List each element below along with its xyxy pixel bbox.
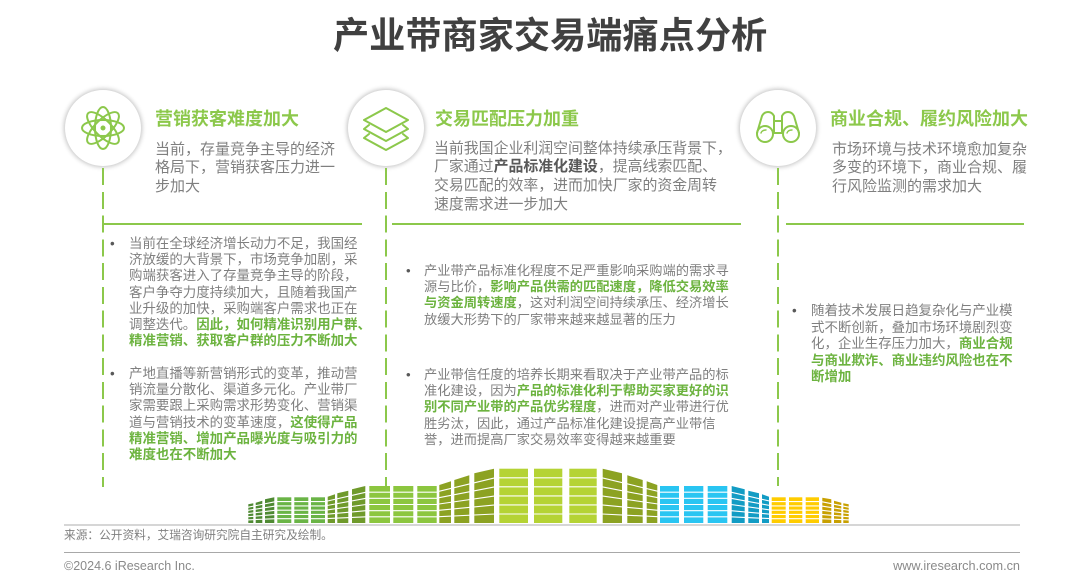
- text: matching bullet two: 准化建设，因为产品的标准化利于帮助买家更好的识: [424, 383, 729, 398]
- text: matching summary: 厂家通过产品标准化建设，提高线索匹配、: [434, 159, 717, 175]
- text: marketing bullet two: [110, 366, 357, 462]
- panel: 交易匹配压力加重: •: [406, 263, 411, 278]
- text: marketing bullet two: 难度也在不断加大: [129, 447, 237, 462]
- text: matching bullet one: 产业带产品标准化程度不足严重影响采购端的需求寻: [424, 263, 729, 278]
- text: matching bullet two: [406, 367, 729, 447]
- text: marketing summary: 格局下，营销获客压力进一: [155, 159, 335, 176]
- text: matching bullet two: 别不同产业带的产品优劣程度，进而对产业带进行优: [424, 399, 729, 414]
- text: compliance summary: [832, 140, 1027, 195]
- text: marketing bullet one: 济放缓的大背景下，市场竞争加剧，采: [129, 252, 357, 267]
- text: compliance summary: 行风险监测的需求加大: [832, 178, 982, 195]
- heading: matching: 交易匹配压力加重: [435, 109, 579, 129]
- text: marketing summary: 步加大: [155, 178, 200, 195]
- icon: atom: [65, 90, 141, 166]
- text: matching summary: 当前我国企业利润空间整体持续承压背景下，: [434, 140, 732, 156]
- text: marketing bullet one: 客户争夺力度持续加大，且随着我国产: [129, 285, 357, 300]
- text: marketing bullet one: 业升级的加快，采购端客户需求也正在: [129, 301, 357, 316]
- panel: 商业合规、履约风险加大: [736, 86, 1028, 486]
- text: marketing bullet two: 销流量分散化、渠道多元化。产业带厂: [129, 382, 357, 397]
- panel: 营销获客难度加大: •: [110, 236, 115, 251]
- illustration: skyline of buildings: [248, 468, 849, 523]
- source note: 来源：公开资料，艾瑞咨询研究院自主研究及绘制。: [64, 529, 333, 542]
- text: marketing bullet one: 调整迭代。因此，如何精准识别用户群、: [129, 317, 371, 332]
- text: matching bullet two: 产业带信任度的培养长期来看取决于产业带产品的标: [424, 367, 729, 382]
- panel: 交易匹配压力加重: [344, 86, 741, 486]
- text: marketing bullet two: 家需要跟上采购需求形势变化、营销渠: [129, 398, 357, 413]
- text: marketing bullet one: 当前在全球经济增长动力不足，我国经: [129, 236, 357, 251]
- text: matching bullet one: 源与比价，影响产品供需的匹配速度，降低交易效率: [424, 279, 729, 294]
- text: compliance bullet: [792, 303, 1013, 384]
- text: matching bullet one: [406, 263, 729, 327]
- text: compliance summary: 市场环境与技术环境愈加复杂: [832, 140, 1027, 158]
- website: www.iresearch.com.cn: [893, 559, 1020, 573]
- text: compliance summary: 多变的环境下，商业合规、履: [832, 159, 1027, 176]
- panel: 营销获客难度加大: [62, 86, 371, 487]
- text: compliance bullet: 化，企业生存压力加大，商业合规: [811, 336, 1013, 351]
- text: compliance bullet: 随着技术发展日趋复杂化与产业模: [811, 303, 1013, 318]
- icon: layers: [348, 90, 424, 166]
- copyright: ©2024.6 iResearch Inc.: [64, 559, 195, 573]
- text: matching bullet one: 放缓大形势下的厂家带来越来越显著的压力: [424, 312, 676, 327]
- title: 产业带商家交易端痛点分析: [333, 15, 767, 56]
- text: marketing bullet one: 购端获客进入了存量竞争主导的阶段，: [129, 268, 357, 283]
- text: matching summary: 速度需求进一步加大: [434, 197, 568, 213]
- text: marketing bullet one: 精准营销、获取客户群的压力不断加大: [129, 333, 357, 348]
- heading: marketing: 营销获客难度加大: [155, 109, 299, 129]
- text: marketing bullet two: 道与营销技术的变革速度，这使得产品: [129, 415, 357, 430]
- heading: compliance: 商业合规、履约风险加大: [830, 109, 1028, 129]
- text: marketing bullet one: [110, 236, 371, 348]
- panel: 营销获客难度加大: •: [110, 366, 115, 381]
- text: matching bullet one: 与资金周转速度，这对利润空间持续承压、经济增长: [424, 295, 729, 310]
- text: matching bullet two: 誉，进而提高厂家交易效率变得越来越重要: [424, 432, 676, 447]
- text: compliance bullet: 式不断创新，叠加市场环境剧烈变: [811, 320, 1013, 334]
- text: compliance bullet: 断增加: [811, 369, 851, 384]
- text: marketing bullet two: 产地直播等新营销形式的变革，推动营: [129, 366, 357, 381]
- text: compliance bullet: 与商业欺诈、商业违约风险也在不: [811, 352, 1013, 368]
- text: marketing summary: 当前，存量竞争主导的经济: [155, 140, 335, 158]
- icon: binoculars: [740, 90, 816, 166]
- panel: 商业合规、履约风险加大: •: [792, 303, 797, 318]
- text: matching summary: 交易匹配的效率，进而加快厂家的资金周转: [434, 178, 717, 194]
- text: matching summary: [434, 140, 732, 213]
- panel: 交易匹配压力加重: •: [406, 367, 411, 382]
- text: matching bullet two: 胜劣汰，因此，通过产品标准化建设提高产业带信: [424, 416, 716, 431]
- text: marketing bullet two: 精准营销、增加产品曝光度与吸引力的: [129, 431, 357, 446]
- text: marketing summary: [155, 140, 335, 195]
